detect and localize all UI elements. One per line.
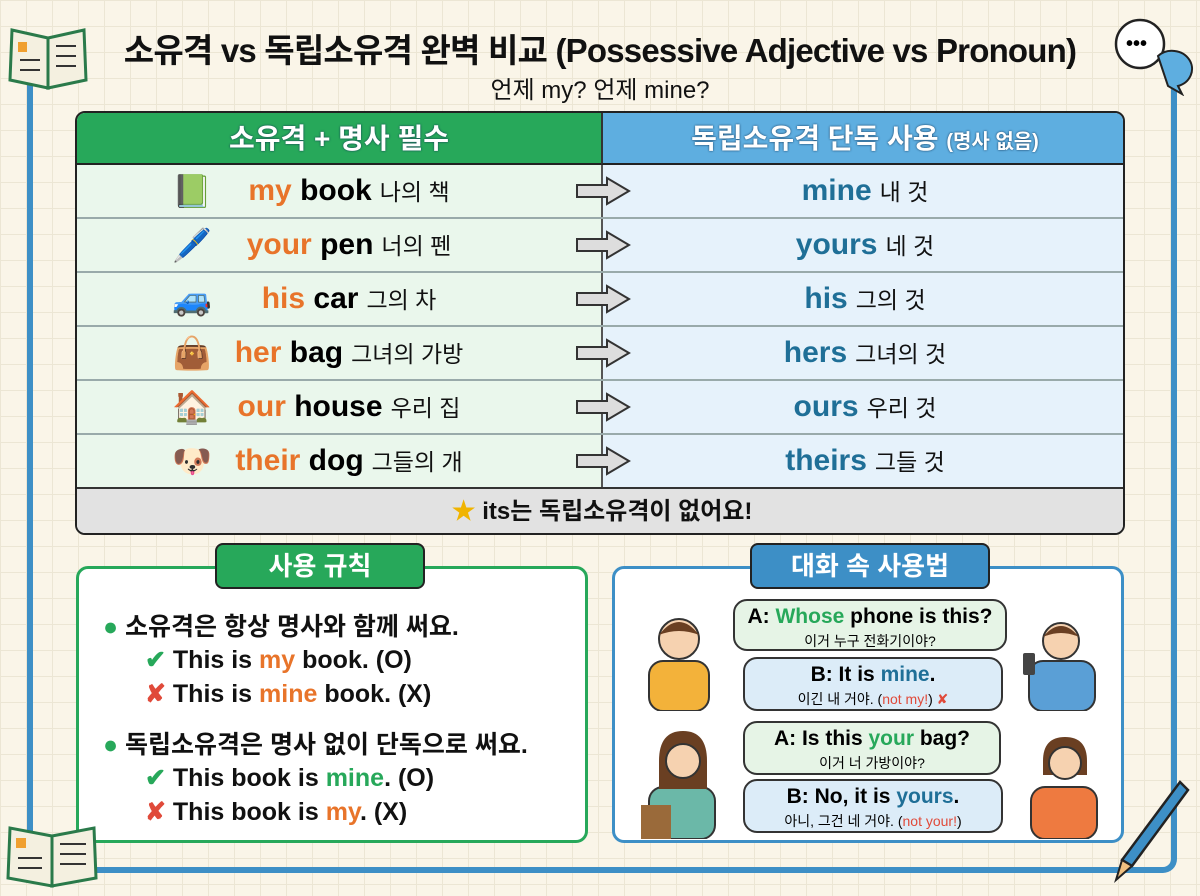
icon: pen bottom-right [1114,780,1190,883]
row: her: 👜 [172,335,212,371]
bubble A2: A: Is this your bag? [774,727,970,750]
row: their: theirs 그들 것 [785,444,945,477]
row: his: 🚙 [172,281,212,317]
row: our: 🏠 [172,389,212,425]
table [75,111,1125,535]
tag: rules [215,543,425,589]
title: 소유격 vs 독립소유격 완벽 비교 (Possessive Adjective vs Pronoun) [124,32,1076,69]
row: their: 🐶 [172,443,212,479]
bubble A1 [733,599,1007,651]
example ok 2: ✔ This book is mine. (O) [145,764,434,792]
tag: rules: 사용 규칙 [269,551,371,581]
row: my: 📗 [172,173,212,209]
header left [77,113,601,165]
tag: dialogue [750,543,990,589]
person B1 [1023,622,1096,711]
header right: 독립소유격 단독 사용 (명사 없음) [691,123,1039,154]
row: our: ours 우리 것 [794,390,936,423]
row: our: our house 우리 집 [238,390,460,423]
row: my [77,165,1127,219]
row: her: hers 그녀의 것 [784,336,946,369]
row: his: his car 그의 차 [262,282,436,315]
panel: dialogue [612,566,1124,843]
example bad 1: ✘ This is mine book. (X) [145,680,431,708]
rule 2: ● 독립소유격은 명사 없이 단독으로 써요. [103,731,528,759]
example bad 2: ✘ This book is my. (X) [145,798,407,826]
header left: 소유격 + 명사 필수 [229,123,449,154]
icon: speech bubbles: ••• [1126,33,1147,55]
person B2 [1030,737,1098,839]
note: its [77,489,1127,535]
row: her [77,327,1127,381]
header right [601,113,1127,165]
row: your: your pen 너의 펜 [247,228,451,261]
row: my: mine 내 것 [802,174,928,207]
person A1 [648,618,710,711]
row: our [77,381,1127,435]
panel: rules [76,566,588,843]
row: her: her bag 그녀의 가방 [235,336,463,369]
bubble B2: B: No, it is yours. [787,785,959,808]
bubble B2 [743,779,1003,833]
row: their: their dog 그들의 개 [235,444,463,477]
row: your: yours 네 것 [796,228,934,261]
bubble A1: A: Whose phone is this? [747,605,992,628]
bubble B1: 이긴 내 거야. (not my!) ✘ [798,691,948,707]
rule 1: ● 소유격은 항상 명사와 함께 써요. [103,613,459,641]
subtitle: 언제 my? 언제 mine? [490,77,710,104]
bubble A2 [743,721,1001,775]
row: your [77,219,1127,273]
note: its: ★ its는 독립소유격이 없어요! [452,498,752,525]
row: my: my book 나의 책 [248,174,450,207]
row: his: his 그의 것 [804,282,926,315]
tag: dialogue: 대화 속 사용법 [791,551,949,581]
person A2 [641,731,716,839]
bubble B1: B: It is mine. [811,663,935,686]
example ok 1: ✔ This is my book. (O) [145,646,412,674]
row: their [77,435,1127,489]
bubble A2: 이거 너 가방이야? [819,755,925,771]
bubble A1: 이거 누구 전화기이야? [804,633,936,649]
icon: book bottom-left [6,826,98,888]
row: your: 🖊️ [172,227,212,263]
bubble B1 [743,657,1003,711]
icon: speech bubbles [1114,18,1194,96]
row: his [77,273,1127,327]
icon: book top-left [8,28,88,90]
bubble B2: 아니, 그건 네 거야. (not your!) [784,813,962,829]
